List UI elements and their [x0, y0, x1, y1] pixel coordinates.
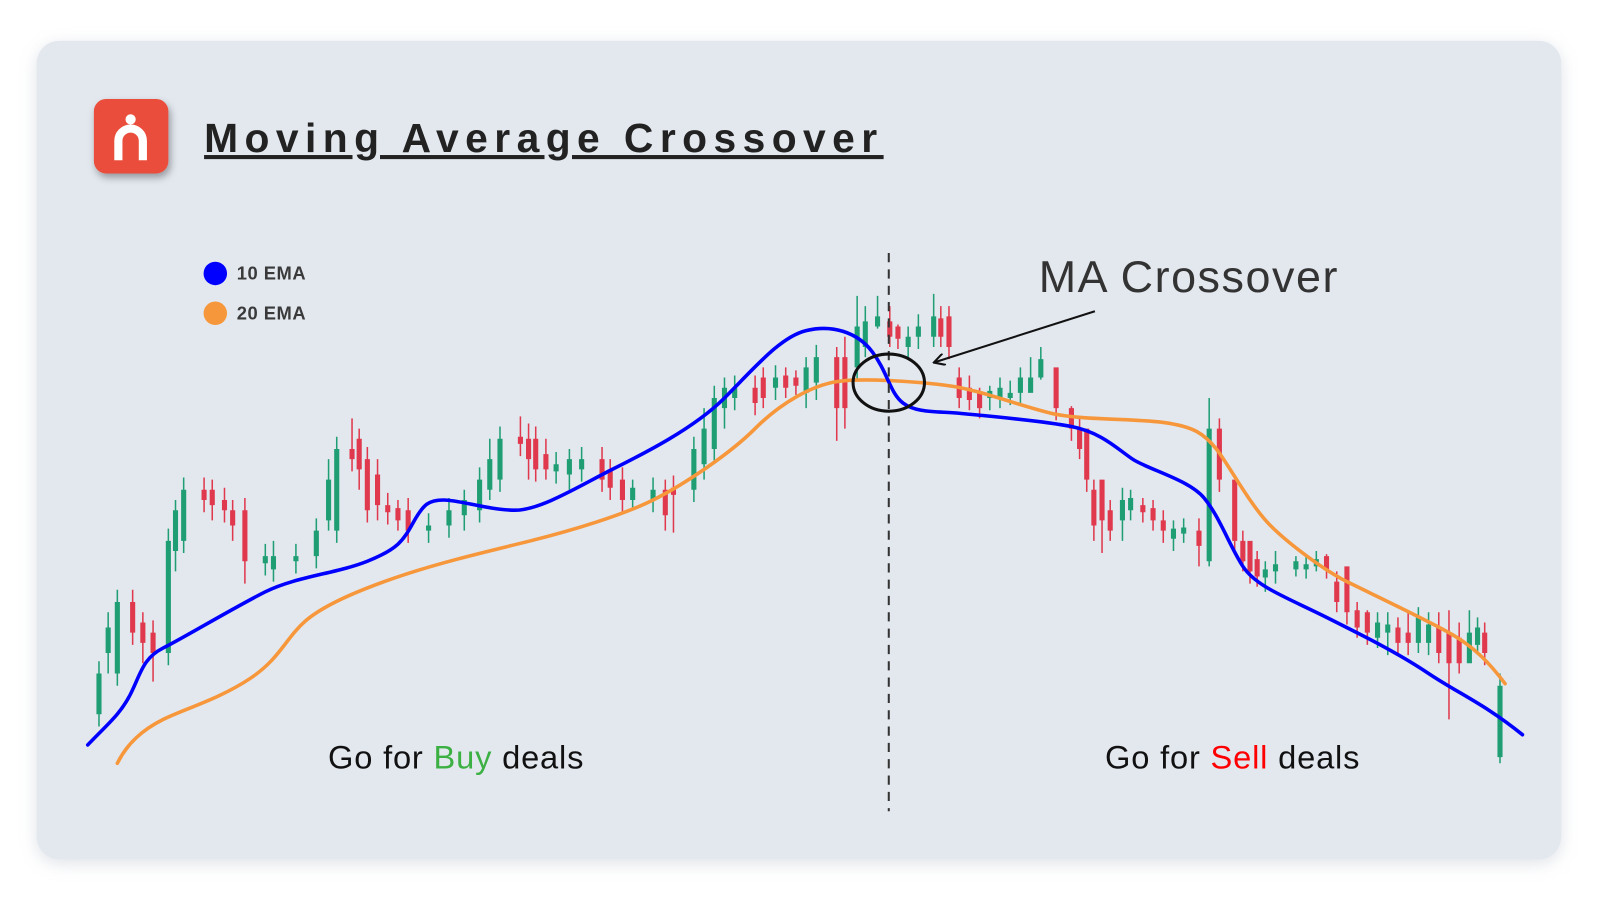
legend: 20 EMA: [237, 302, 306, 323]
text: sell deals: Go for Sell deals: [1105, 738, 1360, 775]
divider: crossover dashed line: [888, 253, 890, 811]
legend: [204, 262, 306, 325]
title: Moving Average Crossover: [204, 115, 884, 161]
chart: 20 EMA line: [117, 380, 1505, 763]
chart: 10 EMA line: [88, 328, 1522, 745]
label: MA Crossover: MA Crossover: [1039, 251, 1339, 302]
chart: candlesticks: [99, 294, 1500, 763]
legend: 10 EMA: [237, 263, 306, 284]
callout: crossover circle: [853, 354, 924, 411]
icon: logo: [94, 99, 168, 173]
arrow: to crossover: [935, 311, 1095, 362]
text: buy deals: Go for Buy deals: [328, 738, 584, 775]
